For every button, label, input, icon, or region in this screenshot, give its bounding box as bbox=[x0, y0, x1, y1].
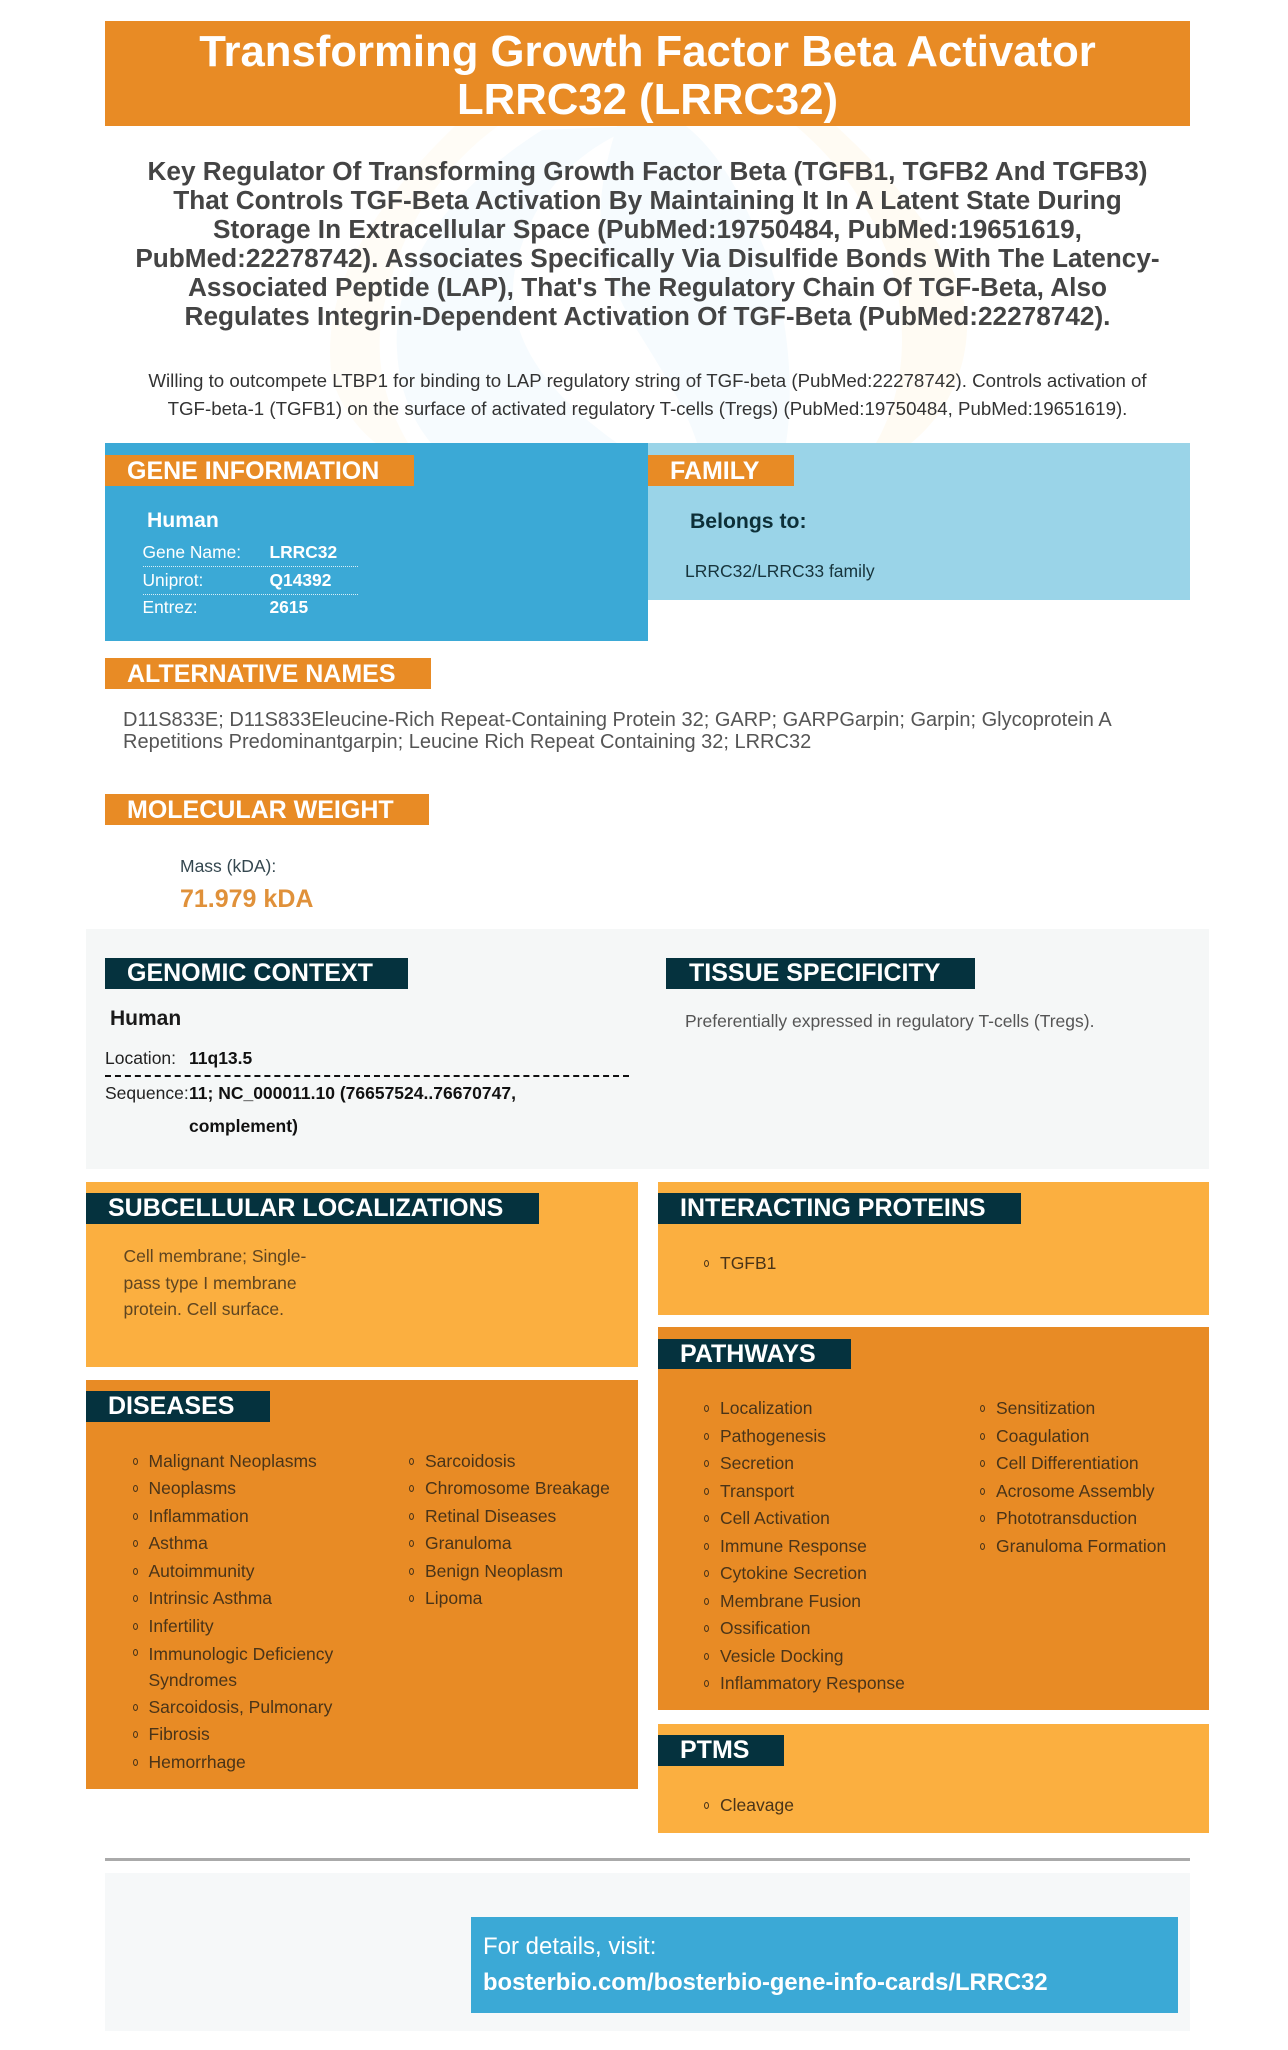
diseases list column 1: Hemorrhage bbox=[148, 1752, 246, 1772]
callout label: For details, visit: bbox=[483, 1933, 656, 1960]
diseases list column 1: Immunologic Deficiency bbox=[148, 1644, 333, 1664]
pathways list column 1: Pathogenesis bbox=[720, 1426, 826, 1446]
footer rule bbox=[105, 1858, 1190, 1861]
summary heading text: PubMed:22278742). Associates Specifically Via Disulfide Bonds With The Latency- bbox=[135, 243, 1160, 273]
pathways list column 2 bbox=[980, 1398, 1166, 1556]
heading: family: FAMILY bbox=[670, 457, 759, 485]
heading: PTMs bbox=[658, 1735, 784, 1766]
pathways list column 1: Immune Response bbox=[720, 1536, 867, 1556]
summary heading text: That Controls TGF-Beta Activation By Maintaining It In A Latent State During bbox=[173, 185, 1122, 215]
pathways list column 1: Localization bbox=[720, 1398, 812, 1418]
diseases list column 1: Infertility bbox=[148, 1616, 214, 1636]
family value: LRRC32/LRRC33 family bbox=[685, 561, 875, 581]
mass value: 71.979 kDA bbox=[180, 885, 313, 913]
diseases list column 2: Retinal Diseases bbox=[425, 1506, 556, 1526]
pathways list column 2: Phototransduction bbox=[996, 1508, 1137, 1528]
belongs to label: Belongs to: bbox=[690, 510, 807, 533]
panel: genomic context and tissue specificity: 11q13.5 bbox=[189, 1048, 252, 1068]
pathways list column 1: Cell Activation bbox=[720, 1508, 830, 1528]
pathways list column 1 bbox=[704, 1398, 905, 1693]
panel: gene information bbox=[105, 443, 648, 641]
location row bbox=[105, 1048, 252, 1068]
heading: diseases: DISEASES bbox=[108, 1392, 234, 1420]
diseases list column 1: Malignant Neoplasms bbox=[148, 1451, 317, 1471]
alternative names text: Repetitions Predominantgarpin; Leucine Rich Repeat Containing 32; LRRC32 bbox=[123, 731, 811, 753]
panel: genomic context and tissue specificity: 11; NC_000011.10 (76657524..76670747, bbox=[189, 1083, 516, 1103]
pathways list column 1: Membrane Fusion bbox=[720, 1590, 861, 1610]
title banner bbox=[105, 21, 1190, 126]
pathways list column 2: Sensitization bbox=[996, 1398, 1095, 1418]
pathways list column 2: Acrosome Assembly bbox=[996, 1480, 1155, 1500]
heading: pathways: PATHWAYS bbox=[680, 1340, 816, 1368]
gene name row: LRRC32 bbox=[270, 542, 337, 562]
alternative names text: D11S833E; D11S833Eleucine-Rich Repeat-Containing Protein 32; GARP; GARPGarpin; Garpin; Glycoprotein A bbox=[123, 709, 1112, 731]
diseases list column 1: Syndromes bbox=[148, 1670, 237, 1690]
callout url: bosterbio.com/bosterbio-gene-info-cards/LRRC32 bbox=[483, 1969, 1048, 1996]
list item: TGFB1 bbox=[720, 1253, 776, 1273]
species label: Human bbox=[147, 509, 219, 532]
heading: molecular weight: MOLECULAR WEIGHT bbox=[127, 796, 394, 824]
diseases list column 1: Fibrosis bbox=[148, 1724, 210, 1744]
diseases list column 2: Granuloma bbox=[425, 1533, 512, 1553]
panel: genomic context and tissue specificity bbox=[86, 929, 1209, 1169]
diseases list column 2: Chromosome Breakage bbox=[425, 1478, 610, 1498]
alternative names text bbox=[123, 709, 1112, 753]
panel: diseases bbox=[86, 1380, 638, 1789]
summary heading text: Storage In Extracellular Space (PubMed:19750484, PubMed:19651619, bbox=[213, 214, 1082, 244]
uniprot row: Q14392 bbox=[270, 570, 331, 590]
diseases list column 1: Neoplasms bbox=[148, 1478, 236, 1498]
uniprot row: Uniprot: bbox=[142, 570, 203, 590]
heading: family bbox=[648, 455, 794, 486]
location row: Location: bbox=[105, 1048, 176, 1068]
pathways list column 1: Inflammatory Response bbox=[720, 1673, 905, 1693]
list item: Cleavage bbox=[720, 1795, 794, 1815]
sequence row bbox=[105, 1083, 516, 1136]
pathways list column 1: Cytokine Secretion bbox=[720, 1563, 867, 1583]
title text: LRRC32 (LRRC32) bbox=[457, 74, 838, 124]
heading: tissue specificity: TISSUE SPECIFICITY bbox=[689, 959, 940, 987]
pathways list column 2: Cell Differentiation bbox=[996, 1453, 1139, 1473]
heading: alternative names: ALTERNATIVE NAMES bbox=[127, 660, 396, 688]
panel: PTMs bbox=[658, 1724, 1209, 1833]
diseases list column 2: Lipoma bbox=[425, 1588, 482, 1608]
subcellular text bbox=[124, 1246, 306, 1319]
pathways list column 1: Ossification bbox=[720, 1618, 810, 1638]
subcellular text: pass type I membrane bbox=[124, 1272, 297, 1292]
title text: Transforming Growth Factor Beta Activator bbox=[199, 27, 1096, 76]
entrez row: 2615 bbox=[270, 597, 308, 617]
summary heading text bbox=[135, 156, 1160, 331]
diseases list column 1: Sarcoidosis, Pulmonary bbox=[148, 1697, 332, 1717]
diseases list column 1: Autoimmunity bbox=[148, 1561, 255, 1581]
heading: diseases bbox=[86, 1391, 270, 1422]
diseases list column 1: Asthma bbox=[148, 1533, 208, 1553]
sequence row: Sequence: bbox=[105, 1083, 189, 1103]
heading: interacting proteins: INTERACTING PROTEINS bbox=[680, 1194, 986, 1222]
panel: interacting proteins bbox=[658, 1182, 1209, 1315]
tissue specificity text: Preferentially expressed in regulatory T-cells (Tregs). bbox=[685, 1011, 1094, 1031]
pathways list column 1: Transport bbox=[720, 1480, 794, 1500]
diseases list column 2: Sarcoidosis bbox=[425, 1451, 515, 1471]
summary heading text: Regulates Integrin-Dependent Activation Of TGF-Beta (PubMed:22278742). bbox=[185, 301, 1110, 331]
panel: genomic context and tissue specificity: complement) bbox=[189, 1116, 298, 1136]
heading: PTMs: PTMS bbox=[680, 1736, 749, 1764]
callout: details link bbox=[471, 1917, 1178, 2013]
description text bbox=[148, 370, 1147, 419]
panel: pathways bbox=[658, 1327, 1209, 1710]
heading: gene information: GENE INFORMATION bbox=[127, 457, 379, 485]
panel: family bbox=[648, 443, 1190, 600]
entrez row: Entrez: bbox=[142, 597, 198, 617]
pathways list column 1: Vesicle Docking bbox=[720, 1646, 844, 1666]
heading: genomic context: GENOMIC CONTEXT bbox=[127, 959, 373, 987]
pathways list column 1: Secretion bbox=[720, 1453, 794, 1473]
diseases list column 2: Benign Neoplasm bbox=[425, 1561, 563, 1581]
diseases list column 1 bbox=[133, 1451, 334, 1772]
panel: footer bbox=[105, 1873, 1190, 2031]
species label: Human bbox=[110, 1007, 181, 1030]
description text: Willing to outcompete LTBP1 for binding to LAP regulatory string of TGF-beta (PubMed:22278742). Controls activation of bbox=[148, 370, 1147, 391]
diseases list column 2 bbox=[409, 1451, 610, 1608]
heading: subcellular localizations: SUBCELLULAR LOCALIZATIONS bbox=[108, 1194, 503, 1222]
description text: TGF-beta-1 (TGFB1) on the surface of activated regulatory T-cells (Tregs) (PubMed:19750484, PubMed:19651619). bbox=[168, 398, 1127, 419]
summary heading text: Associated Peptide (LAP), That's The Regulatory Chain Of TGF-Beta, Also bbox=[188, 272, 1107, 302]
diseases list column 1: Inflammation bbox=[148, 1506, 249, 1526]
entrez row bbox=[142, 597, 308, 617]
pathways list column 2: Granuloma Formation bbox=[996, 1536, 1166, 1556]
gene name row: Gene Name: bbox=[142, 542, 241, 562]
heading: pathways bbox=[658, 1339, 851, 1369]
mass label: Mass (kDA): bbox=[180, 856, 276, 876]
uniprot row bbox=[142, 568, 358, 595]
panel: subcellular localizations bbox=[86, 1182, 638, 1367]
gene name row bbox=[142, 540, 358, 567]
subcellular text: Cell membrane; Single- bbox=[124, 1246, 306, 1266]
summary heading text: Key Regulator Of Transforming Growth Factor Beta (TGFB1, TGFB2 And TGFB3) bbox=[147, 156, 1148, 186]
title text bbox=[199, 27, 1096, 124]
dashed divider bbox=[105, 1075, 629, 1077]
subcellular text: protein. Cell surface. bbox=[124, 1299, 284, 1319]
pathways list column 2: Coagulation bbox=[996, 1426, 1089, 1446]
diseases list column 1: Intrinsic Asthma bbox=[148, 1588, 272, 1608]
